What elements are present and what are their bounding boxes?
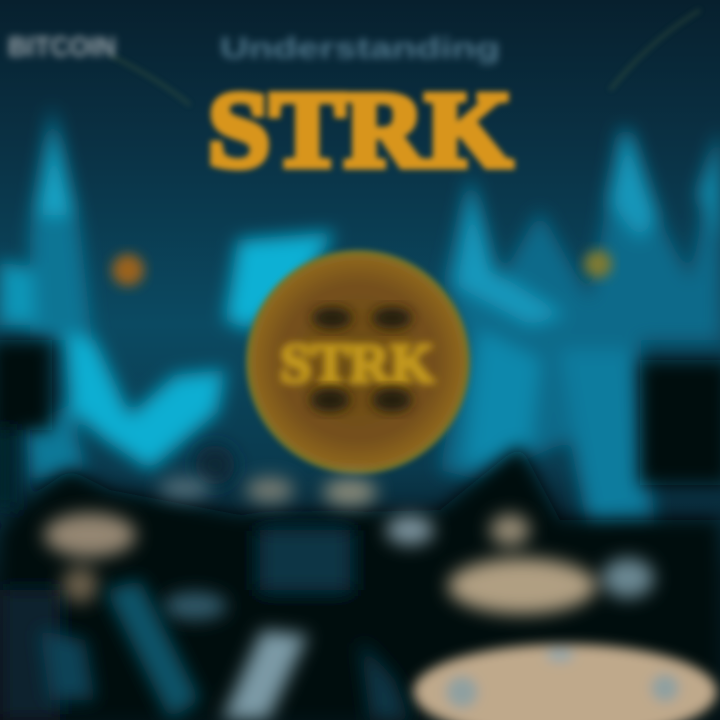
table: bottom right tan surface [413, 644, 717, 720]
chart: right blue city peaks [440, 125, 720, 540]
icon: central gold coin [246, 250, 470, 474]
chart: left blue city peaks [0, 105, 335, 480]
light desk highlights [44, 477, 654, 620]
coin label: STRK [280, 333, 434, 395]
top-left logo text: BITCOIN [8, 31, 116, 62]
blue figures bottom left [40, 580, 410, 720]
icon: small left coin [112, 254, 144, 286]
icon: small right coin [584, 250, 612, 278]
arc lines in sky [110, 10, 700, 105]
title: STRK: STRK [208, 71, 512, 190]
dark audience silhouettes [0, 340, 720, 720]
subtitle heading: Understanding [220, 32, 500, 65]
